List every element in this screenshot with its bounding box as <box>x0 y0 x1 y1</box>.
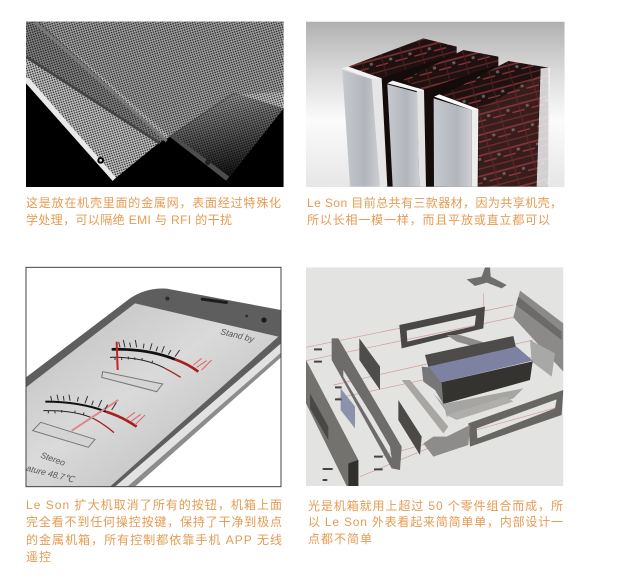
caption: phone control <box>26 497 282 564</box>
chassis core <box>422 336 533 417</box>
mesh sheets <box>26 22 284 180</box>
screen labels: ature 48.7℃ <box>26 463 76 485</box>
caption: metal mesh <box>26 195 281 227</box>
lower readout <box>33 422 95 447</box>
screws <box>314 349 383 480</box>
phone side rail <box>115 343 281 487</box>
phone body <box>26 289 281 487</box>
unit 3 <box>434 61 550 187</box>
upper readout <box>102 372 163 392</box>
sheet edges <box>26 22 229 181</box>
panel: phone app photo <box>26 267 281 487</box>
screen labels: Stand by <box>220 326 256 344</box>
screen <box>26 303 278 487</box>
rear stand <box>467 267 507 288</box>
caption: chassis parts: 点都不简单 <box>308 532 372 546</box>
unit 1 <box>342 38 457 187</box>
caption: phone control: 完全看不到任何操控按键，保持了干净到极点 <box>26 514 282 529</box>
screen labels: Stereo <box>39 450 67 468</box>
blue plate <box>341 388 355 428</box>
panel: exploded chassis diagram <box>306 267 563 486</box>
lower VU meter <box>43 395 145 433</box>
middle brackets <box>398 380 513 457</box>
caption: chassis parts <box>308 498 563 546</box>
rear frame <box>399 307 485 348</box>
caption: chassis parts: 光是机箱就用上超过 50 个零件组合而成，所 <box>308 498 563 513</box>
mounting holes <box>97 157 210 165</box>
upper VU meter <box>110 340 212 377</box>
caption: phone control: Le Son 扩大机取消了所有的按钮，机箱上面 <box>26 497 282 512</box>
red guide lines <box>306 293 560 477</box>
panel: metal mesh photo <box>26 22 284 187</box>
caption: chassis parts: 以 Le Son 外表看起来简简单单，内部设计一 <box>308 514 563 529</box>
infographic: four product photos with captions <box>26 22 564 562</box>
small plate <box>359 338 380 390</box>
caption: metal mesh: 这是放在机壳里面的金属网，表面经过特殊化 <box>26 195 281 210</box>
back panel <box>513 291 563 377</box>
caption: metal mesh: 学处理，可以隔绝 EMI 与 RFI 的干扰 <box>26 212 232 227</box>
top bezel details <box>165 297 267 323</box>
caption: phone control: 遥控 <box>26 550 51 564</box>
caption: three components <box>307 195 562 227</box>
screen labels <box>26 326 256 485</box>
front panel <box>306 360 358 486</box>
caption: phone control: 的金属机箱，所有控制都依靠手机 APP 无线 <box>26 532 282 547</box>
lower right frame <box>468 390 563 447</box>
panel: three stacked components photo <box>306 22 565 187</box>
front frame <box>332 338 402 470</box>
caption: three components: Le Son 目前总共有三款器材，因为共享机壳， <box>307 195 562 210</box>
caption: three components: 所以长相一模一样，而且平放或直立都可以 <box>307 212 550 227</box>
rear bracket <box>446 335 484 346</box>
unit 2 <box>387 50 498 187</box>
